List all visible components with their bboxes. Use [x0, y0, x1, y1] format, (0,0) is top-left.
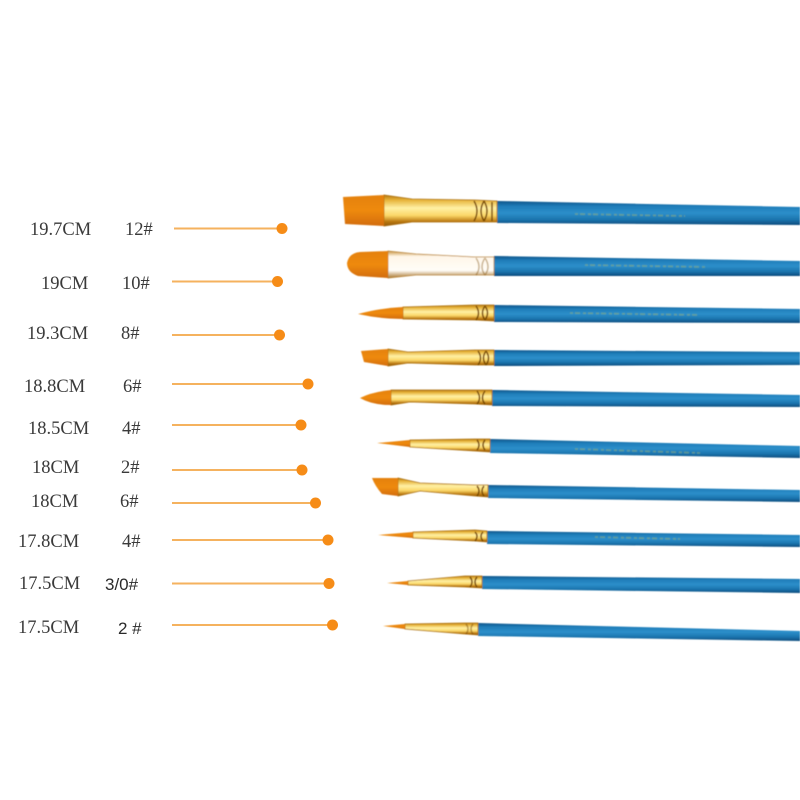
label row: 19.3CM 8# — [27, 324, 285, 344]
label row: 19CM 10# — [41, 274, 283, 294]
label row: 18.5CM 4#: 18.5CM — [28, 419, 89, 439]
label row: 19.7CM 12# — [30, 220, 288, 240]
size labels and leader lines — [18, 220, 338, 638]
brush 10# — [347, 251, 800, 278]
label row: 17.5CM 3/0# — [19, 574, 334, 594]
brush 4# filbert — [360, 390, 800, 407]
brush 6# flat — [361, 349, 800, 366]
label row: 19CM 10#: 10# — [122, 274, 150, 294]
label row: 17.5CM 2#: 17.5CM — [18, 618, 79, 638]
label row: 19.7CM 12#: 19.7CM — [30, 220, 91, 240]
label row: 19.3CM 8#: 19.3CM — [27, 324, 88, 344]
label row: 17.5CM 2#: 2 # — [118, 619, 142, 638]
label row: 17.5CM 3/0#: 3/0# — [105, 575, 139, 594]
label row: 17.8CM 4#: 4# — [122, 532, 140, 552]
label row: 18CM 6# — [31, 492, 321, 512]
label row: 17.5CM 3/0#: 17.5CM — [19, 574, 80, 594]
label row: 17.8CM 4# — [18, 532, 334, 552]
label row: 17.8CM 4#: 17.8CM — [18, 532, 79, 552]
label row: 18.8CM 6#: 6# — [123, 377, 142, 397]
label row: 18CM 2# — [32, 458, 308, 478]
label row: 19CM 10#: 19CM — [41, 274, 88, 294]
label row: 19.3CM 8#: 8# — [121, 324, 140, 344]
label row: 18.8CM 6# — [24, 377, 314, 397]
label row: 17.5CM 2# — [18, 618, 338, 638]
brush 8# — [358, 305, 800, 323]
label row: 18CM 6#: 6# — [120, 492, 138, 512]
brush 2# — [383, 623, 800, 641]
label row: 19.7CM 12#: 12# — [125, 220, 153, 240]
brush 12# — [343, 195, 800, 226]
brush 6# angled — [372, 478, 800, 502]
label row: 18CM 2#: 2# — [121, 458, 140, 478]
brush 3/0# — [387, 576, 800, 593]
label row: 18CM 6#: 18CM — [31, 492, 78, 512]
brush 2# round — [377, 439, 800, 458]
brushes — [343, 195, 800, 641]
label row: 18.5CM 4#: 4# — [122, 419, 140, 439]
label row: 18.5CM 4# — [28, 419, 306, 439]
label row: 18.8CM 6#: 18.8CM — [24, 377, 85, 397]
label row: 18CM 2#: 18CM — [32, 458, 79, 478]
brush 4# round — [378, 530, 800, 547]
